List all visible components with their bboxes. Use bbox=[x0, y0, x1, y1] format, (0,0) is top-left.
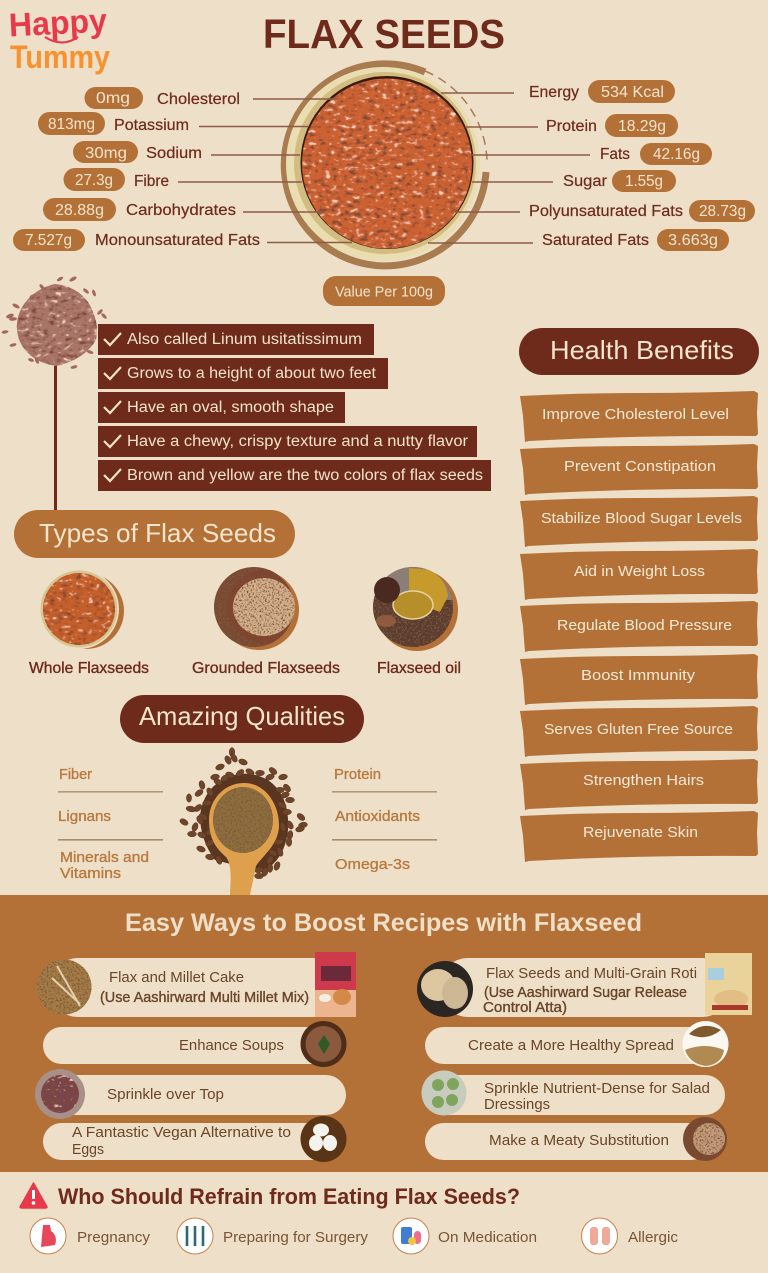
nutrient: polyunsaturated fats bbox=[455, 200, 755, 222]
refrain: preparing for surgery bbox=[177, 1218, 369, 1254]
nutrient: polyunsaturated fats: Polyunsaturated Fats bbox=[529, 203, 683, 220]
recipe: flax and millet cake: (Use Aashirward Multi Millet Mix) bbox=[100, 990, 309, 1006]
recipe: multi-grain roti: (Use Aashirward Sugar Release bbox=[484, 985, 687, 1001]
nutrient: fats bbox=[472, 143, 712, 165]
nutrient list: left bbox=[13, 87, 352, 251]
fact 5 bbox=[98, 460, 491, 491]
nutrient: sodium: 30mg bbox=[85, 145, 127, 162]
qualities: right list bbox=[332, 766, 437, 873]
recipe: vegan alternative to eggs: A Fantastic Vegan Alternative to bbox=[72, 1125, 291, 1141]
refrain: preparing for surgery: Preparing for Surgery bbox=[223, 1229, 369, 1246]
nutrient: carbohydrates: 28.88g bbox=[55, 202, 104, 219]
nutrient: potassium: 813mg bbox=[48, 116, 95, 133]
nutrient: fibre: Fibre bbox=[134, 173, 169, 190]
logo: Happy Tummy: Happy bbox=[8, 1, 108, 44]
logo: Happy Tummy: Tummy bbox=[10, 39, 110, 75]
refrain: allergic bbox=[582, 1218, 679, 1254]
type: flaxseed oil: Flaxseed oil bbox=[377, 660, 461, 677]
heading: amazing qualities: Amazing Qualities bbox=[139, 701, 345, 731]
qualities: left list: Fiber bbox=[59, 766, 92, 783]
benefit 9 bbox=[520, 811, 758, 862]
refrain: on medication bbox=[393, 1218, 537, 1254]
recipe: meaty substitution bbox=[425, 1117, 727, 1161]
nutrient: sodium: Sodium bbox=[146, 145, 202, 162]
benefit 3 bbox=[520, 496, 758, 547]
type: grounded flaxseeds: Grounded Flaxseeds bbox=[192, 660, 340, 677]
refrain: pregnancy: Pregnancy bbox=[77, 1229, 151, 1246]
qualities: left list bbox=[58, 766, 163, 882]
benefit 6: Boost Immunity bbox=[581, 667, 696, 684]
nutrient: monounsaturated fats: 7.527g bbox=[25, 232, 72, 249]
nutrient: potassium bbox=[38, 112, 308, 135]
benefit 1 bbox=[520, 391, 758, 442]
qualities: right list: Protein bbox=[334, 766, 381, 783]
flax plant stem bbox=[54, 365, 57, 512]
nutrient: monounsaturated fats bbox=[13, 229, 352, 251]
nutrient: energy: 534 Kcal bbox=[601, 84, 664, 101]
heading: easy ways: Easy Ways to Boost Recipes with Flaxseed bbox=[125, 909, 642, 937]
nutrient: protein: Protein bbox=[546, 118, 597, 135]
recipe: multi-grain roti: Control Atta) bbox=[483, 1000, 567, 1016]
recipe: sprinkle over top: Sprinkle over Top bbox=[107, 1087, 224, 1103]
benefit 7 bbox=[520, 706, 758, 757]
refrain: pregnancy bbox=[30, 1218, 151, 1254]
product pack: multi millet mix bbox=[315, 952, 356, 1017]
recipe: vegan alternative to eggs: Eggs bbox=[72, 1142, 104, 1158]
flax seed pile bbox=[1, 275, 108, 369]
recipe: vegan alternative to eggs bbox=[43, 1116, 346, 1162]
type: whole flaxseeds bbox=[29, 569, 149, 677]
recipe: salad dressings: Dressings bbox=[484, 1097, 550, 1113]
fact 1 bbox=[98, 324, 374, 355]
nutrient: protein bbox=[465, 114, 678, 137]
type: grounded flaxseeds bbox=[192, 567, 340, 677]
fact 2: Grows to a height of about two feet bbox=[127, 365, 377, 382]
nutrient: energy: Energy bbox=[529, 84, 579, 101]
recipe: enhance soups: Enhance Soups bbox=[179, 1038, 284, 1054]
benefit 2 bbox=[520, 444, 758, 495]
nutrient: sugar: 1.55g bbox=[625, 173, 663, 190]
heading: amazing qualities bbox=[120, 695, 364, 743]
fact 3 bbox=[98, 392, 345, 423]
benefit 4 bbox=[520, 549, 758, 600]
recipe: meaty substitution: Make a Meaty Substitution bbox=[489, 1133, 669, 1149]
type: whole flaxseeds: Whole Flaxseeds bbox=[29, 660, 149, 677]
nutrient: fibre bbox=[64, 168, 302, 191]
nutrient: energy bbox=[441, 80, 675, 103]
icon: warning triangle bbox=[20, 1183, 47, 1208]
recipe: flax and millet cake bbox=[36, 952, 356, 1017]
recipe: multi-grain roti: Flax Seeds and Multi-Grain Roti bbox=[486, 966, 697, 982]
heading: types of flax seeds: Types of Flax Seeds bbox=[39, 518, 276, 548]
nutrient: carbohydrates: Carbohydrates bbox=[126, 202, 236, 219]
benefit 7: Serves Gluten Free Source bbox=[544, 721, 733, 738]
health benefits list bbox=[520, 391, 758, 862]
value per 100g pill: Value Per 100g bbox=[335, 284, 433, 300]
benefit 1: Improve Cholesterol Level bbox=[542, 406, 729, 423]
recipe: multi-grain roti bbox=[417, 953, 752, 1017]
qualities: left list: Minerals and bbox=[60, 849, 149, 866]
heading: health benefits bbox=[519, 328, 759, 375]
nutrient: sugar: Sugar bbox=[563, 173, 607, 190]
product pack: sugar release atta bbox=[705, 953, 752, 1015]
refrain: on medication: On Medication bbox=[438, 1229, 537, 1246]
benefit 9: Rejuvenate Skin bbox=[583, 824, 698, 841]
heading: types of flax seeds bbox=[14, 510, 295, 558]
nutrient: polyunsaturated fats: 28.73g bbox=[699, 203, 746, 220]
fact 2 bbox=[98, 358, 388, 389]
facts checklist bbox=[98, 324, 491, 491]
benefit 5 bbox=[520, 601, 758, 652]
recipe: sprinkle over top bbox=[35, 1069, 346, 1119]
qualities: right list: Omega-3s bbox=[335, 856, 410, 873]
nutrient: saturated fats: Saturated Fats bbox=[542, 232, 649, 249]
recipe: salad dressings bbox=[422, 1070, 725, 1116]
fact 4: Have a chewy, crispy texture and a nutty flavor bbox=[127, 433, 468, 450]
nutrient: sodium bbox=[73, 141, 300, 163]
nutrient: fats: 42.16g bbox=[653, 146, 700, 163]
nutrient: monounsaturated fats: Monounsaturated Fats bbox=[95, 232, 260, 249]
refrain: allergic: Allergic bbox=[628, 1229, 679, 1246]
qualities: spoon with flax seeds bbox=[179, 748, 308, 895]
nutrient: cholesterol bbox=[84, 87, 338, 109]
benefit 4: Aid in Weight Loss bbox=[574, 563, 705, 580]
nutrient: fats: Fats bbox=[600, 146, 630, 163]
qualities: left list: Vitamins bbox=[60, 865, 121, 882]
benefit 3: Stabilize Blood Sugar Levels bbox=[541, 510, 742, 527]
nutrient: cholesterol: 0mg bbox=[96, 90, 130, 107]
nutrient: saturated fats: 3.663g bbox=[668, 232, 718, 249]
benefit 5: Regulate Blood Pressure bbox=[557, 617, 732, 634]
recipe: healthy spread: Create a More Healthy Spread bbox=[468, 1038, 674, 1054]
fact 3: Have an oval, smooth shape bbox=[127, 399, 334, 416]
nutrient: potassium: Potassium bbox=[114, 117, 189, 134]
panel: recipes band bbox=[0, 895, 768, 1172]
type: flaxseed oil bbox=[373, 565, 461, 677]
benefit 6 bbox=[520, 654, 758, 705]
benefit 8 bbox=[520, 759, 758, 810]
nutrient: saturated fats bbox=[428, 229, 729, 251]
benefit 2: Prevent Constipation bbox=[564, 458, 716, 475]
heading: who should refrain: Who Should Refrain from Eating Flax Seeds? bbox=[58, 1184, 520, 1209]
nutrient: sugar bbox=[472, 170, 676, 192]
nutrient: protein: 18.29g bbox=[618, 118, 666, 135]
recipe: enhance soups bbox=[43, 1021, 346, 1067]
qualities: right list: Antioxidants bbox=[335, 808, 420, 825]
nutrient: fibre: 27.3g bbox=[75, 172, 113, 189]
benefit 8: Strengthen Hairs bbox=[583, 772, 704, 789]
nutrient list: right bbox=[428, 80, 755, 251]
nutrient: carbohydrates bbox=[43, 198, 325, 221]
nutrient: cholesterol: Cholesterol bbox=[157, 91, 240, 108]
qualities: left list: Lignans bbox=[58, 808, 111, 825]
recipe: flax and millet cake: Flax and Millet Cake bbox=[109, 970, 244, 986]
title: FLAX SEEDS bbox=[263, 11, 505, 57]
logo: Happy Tummy bbox=[8, 1, 110, 75]
value per 100g pill bbox=[323, 276, 445, 306]
recipe: healthy spread bbox=[425, 1021, 728, 1067]
fact 1: Also called Linum usitatissimum bbox=[127, 331, 362, 348]
recipe: salad dressings: Sprinkle Nutrient-Dense for Salad bbox=[484, 1081, 710, 1097]
heading: health benefits: Health Benefits bbox=[550, 335, 734, 365]
bowl of flax seeds bbox=[284, 64, 487, 266]
fact 4 bbox=[98, 426, 477, 457]
fact 5: Brown and yellow are the two colors of flax seeds bbox=[127, 467, 483, 484]
